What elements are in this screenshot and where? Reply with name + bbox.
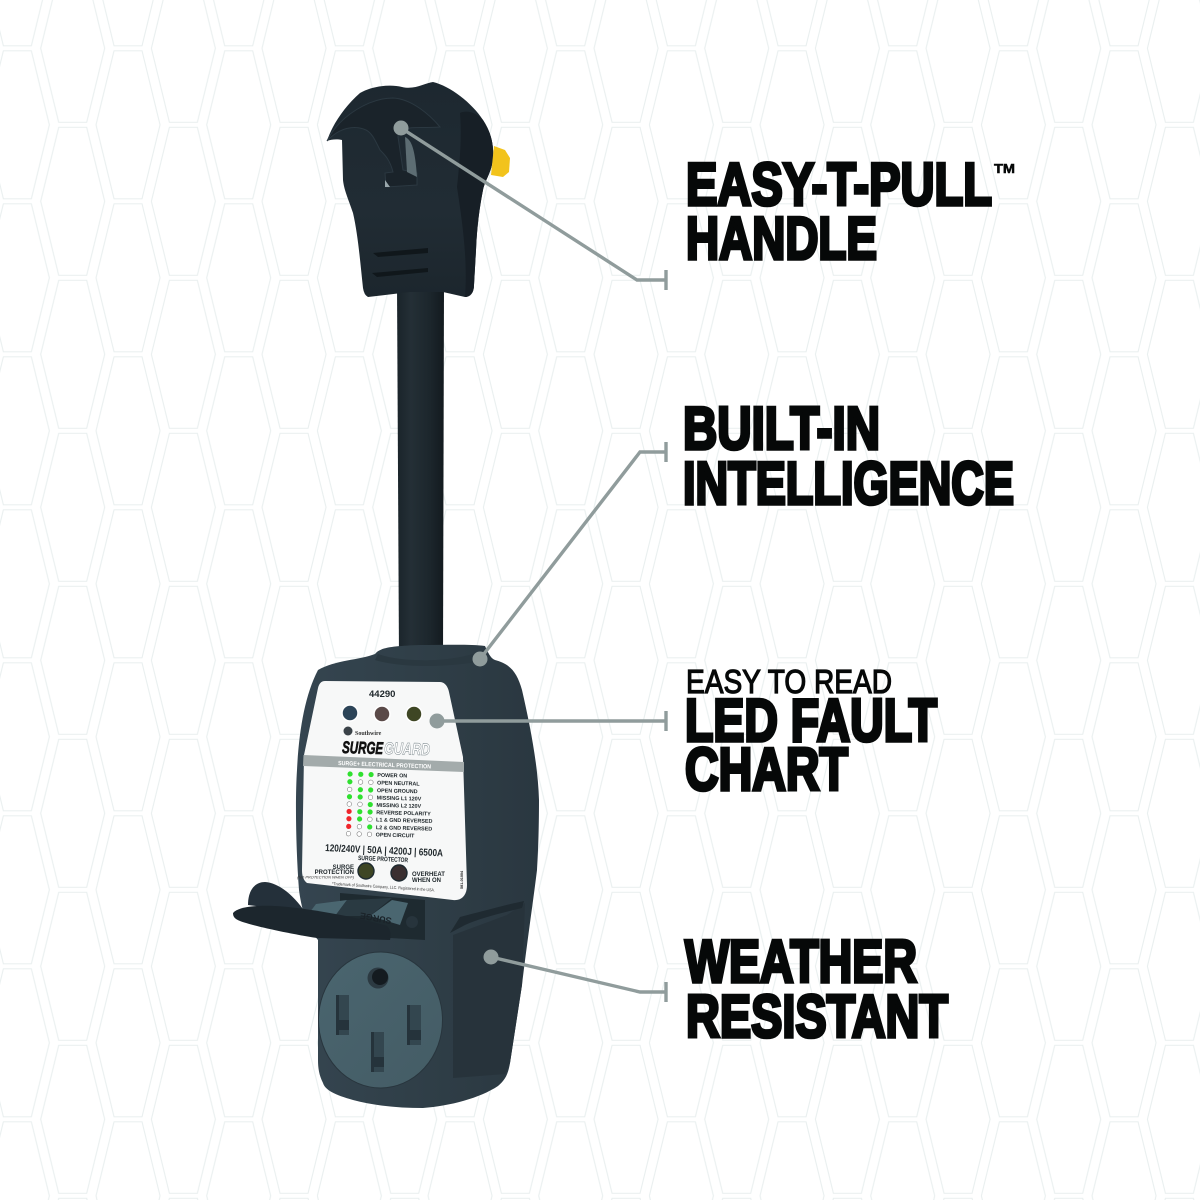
surge protection label: (NO PROTECTION WHEN OFF) [297,874,355,880]
LED fault chart: L2 & GND REVERSED [376,825,432,833]
heading: Built-in intelligence [683,395,1014,517]
heading: Easy-T-Pull handle [686,151,1015,272]
main body housing [296,645,539,1108]
plug head with handle [327,82,493,297]
heading: Easy to read LED fault chart: CHART [685,736,848,803]
ratings line: 120/240V | 50A | 4200J | 6500A [325,843,443,859]
callout leader: intelligence [472,442,666,666]
LED fault chart: L1 & GND REVERSED [376,817,433,825]
outlet face [318,952,442,1088]
model number: 44290 [369,689,395,700]
overheat label: WHEN ON [412,878,441,884]
heading: Easy to read LED fault chart [685,663,937,803]
heading: Easy-T-Pull handle: TM [994,161,1015,176]
callout leader: weather [484,950,666,1002]
heading: Weather resistant: RESISTANT [686,983,948,1050]
lid tab [248,882,305,912]
right slot [407,1005,421,1045]
surge protection label: SURGE [333,865,354,871]
LED fault chart: POWER ON [377,773,407,780]
surge protection light [358,863,374,879]
heading: Built-in intelligence: INTELLIGENCE [683,450,1014,517]
overheat label [412,872,445,884]
left slot [336,995,349,1035]
heading: Easy-T-Pull handle: HANDLE [686,205,877,272]
surge protection label [297,865,355,880]
surge protector caption: SURGE PROTECTOR [358,855,408,864]
ground hole [368,968,388,988]
gray band [303,755,464,772]
label panel: GUARD [384,739,430,759]
LED fault chart [346,771,434,840]
LED fault chart: MISSING L1 120V [377,795,422,803]
LED fault chart: REVERSE POLARITY [376,810,431,818]
indicator lights [342,705,422,722]
LED fault chart: OPEN NEUTRAL [377,780,420,788]
LED fault chart: MISSING L2 120V [376,803,422,810]
overheat light [391,865,407,881]
callout leader: LED chart [430,711,666,731]
yellow tab [491,146,510,177]
gray band: SURGE+ ELECTRICAL PROTECTION [338,761,431,771]
LED fault chart: OPEN GROUND [377,788,418,795]
hinge cover [310,893,425,940]
plug cord [397,285,444,660]
hinge cover: SURGE [359,910,392,926]
heading: Weather resistant: WEATHER [685,928,917,995]
Southwire logo: Southwire [355,731,382,737]
heading: Built-in intelligence: BUILT-IN [683,395,880,462]
surge protection label: PROTECTION [315,870,354,876]
lid disk [233,906,391,940]
part number: 581-01004 [460,870,464,889]
heading: Easy to read LED fault chart: LED FAULT [685,687,937,754]
bottom slot [371,1032,384,1072]
heading: Easy-T-Pull handle: EASY-T-PULL [686,151,992,218]
callout leader: handle [394,120,666,290]
SurgeGuard wordmark: SURGE [342,738,384,758]
device: surge protector [233,82,539,1108]
Southwire logo [344,726,382,737]
overheat label: OVERHEAT [412,872,445,878]
label panel [297,681,467,900]
trademark note: *Trademark of Southwire Company, LLC. Registered in the USA. [332,881,435,892]
heading: Weather resistant [685,928,948,1050]
LED fault chart: OPEN CIRCUIT [376,832,415,839]
heading: Easy to read LED fault chart: EASY TO READ [686,663,892,700]
